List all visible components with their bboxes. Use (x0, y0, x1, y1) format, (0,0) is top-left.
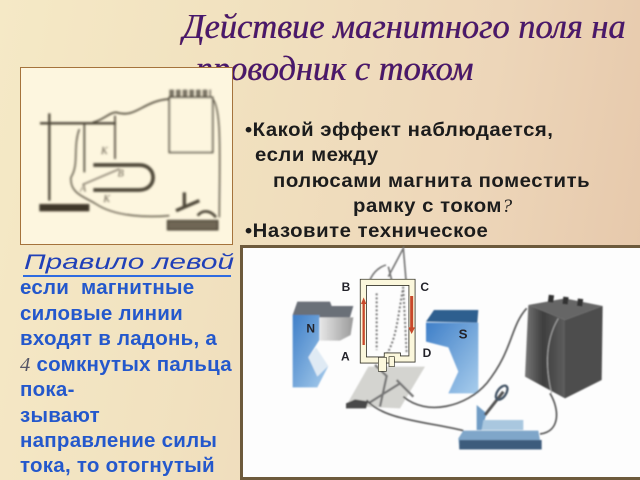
point and pole labels: A (341, 349, 350, 363)
wires (367, 308, 557, 434)
battery (525, 298, 603, 398)
sketch labels: K (100, 146, 109, 157)
horseshoe magnet (83, 165, 153, 190)
current arrow up (361, 297, 366, 345)
rule text: зывают (20, 404, 100, 427)
point and pole labels (306, 280, 468, 363)
wire frame ABCD (361, 282, 415, 371)
rule text: пока- (20, 378, 75, 401)
point and pole labels: D (423, 346, 432, 360)
point and pole labels: C (420, 280, 429, 294)
question text: •Какой эффект наблюдается, (245, 120, 553, 141)
knife switch (458, 384, 542, 449)
wires (71, 97, 220, 217)
rule text: если магнитные (20, 276, 194, 299)
question text (245, 120, 590, 242)
question text: если между (255, 145, 379, 166)
current arrow down (408, 296, 415, 334)
stand (39, 113, 116, 211)
rule heading: Правило левой (24, 251, 234, 274)
question text: полюсами магнита поместить (273, 171, 590, 192)
title line 1: Действие магнитного поля на (183, 8, 626, 46)
title (180, 8, 626, 88)
rotated frame behind (370, 248, 407, 360)
question text: •Назовите техническое (245, 221, 488, 242)
switch (168, 192, 218, 230)
S magnet (426, 310, 478, 393)
question text: рамку с током? (353, 196, 513, 217)
sketch labels: B (118, 169, 124, 180)
N magnet (293, 302, 353, 387)
sketch labels: A (79, 183, 87, 194)
panel: apparatus photo (240, 245, 640, 480)
base plate (346, 365, 425, 408)
rule text: направление силы (20, 429, 217, 452)
point and pole labels: B (342, 280, 351, 294)
title line 2: проводник с током (196, 50, 474, 88)
panel: experiment sketch (20, 67, 233, 245)
sketch labels: K (102, 194, 111, 205)
sketch labels (79, 146, 124, 205)
point and pole labels: N (306, 322, 315, 336)
battery (169, 93, 213, 152)
point and pole labels: S (459, 327, 468, 342)
rule text: тока, то отогнутый (20, 454, 215, 477)
rule text: 4 сомкнутых пальца (20, 353, 232, 376)
rule text (20, 276, 232, 477)
rule text: силовые линии (20, 302, 183, 325)
rule text: входят в ладонь, а (20, 327, 217, 350)
